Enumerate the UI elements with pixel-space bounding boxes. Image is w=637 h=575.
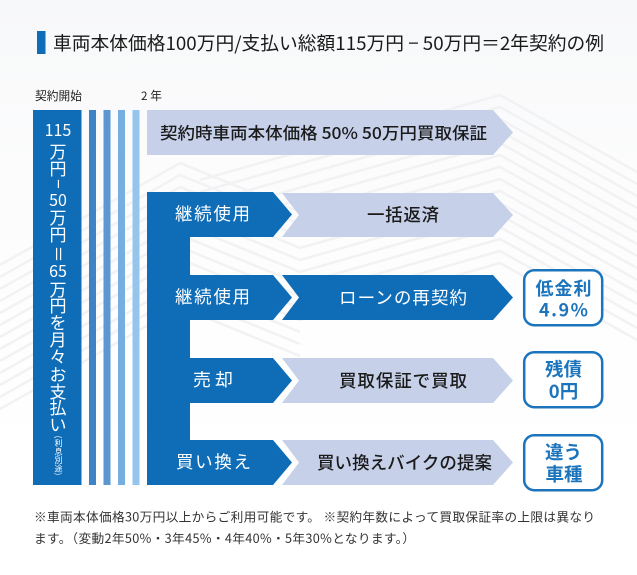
- panel: monthly payment column: 円: [50, 155, 66, 180]
- arrow: loan re-contract: [282, 275, 513, 320]
- panel: monthly payment column: 万: [50, 276, 66, 301]
- panel: monthly payment column: を: [50, 309, 66, 334]
- arrow: guaranteed buyback: 契約時車両本体価格 50% 50万円買取保証: [160, 120, 487, 144]
- arrow: sale: [147, 358, 292, 403]
- callout: zero residual: 0円: [549, 378, 578, 404]
- footnote: ※車両本体価格30万円以上からご利用可能です。 ※契約年数によって買取保証率の上限は異なり: [34, 506, 595, 526]
- arrow: replacement: [147, 440, 292, 485]
- footnote: [34, 506, 595, 547]
- arrow: continue use 2: [147, 275, 292, 320]
- arrow: continue use 1: [147, 192, 292, 237]
- arrow: buyback: 買取保証で買取: [339, 368, 468, 393]
- arrow: continue use 1: 継続使用: [175, 201, 250, 226]
- arrow: replacement bike proposal: [282, 440, 513, 485]
- note: interest separate: 利: [54, 438, 62, 449]
- panel: monthly payment column: 115: [45, 117, 71, 141]
- panel: monthly payment column: 円: [50, 221, 66, 246]
- panel: monthly payment column: お: [50, 361, 66, 386]
- panel: monthly payment column: ＝: [47, 246, 72, 262]
- callout: different model: [524, 435, 602, 490]
- arrow: replacement: 買い換え: [176, 449, 251, 474]
- timeline stripes: [89, 110, 140, 485]
- arrow: guaranteed buyback: [147, 110, 513, 155]
- panel: monthly payment column: [33, 110, 82, 485]
- panel: options spine with arrows: [147, 192, 292, 485]
- label: contract start: 契約開始: [35, 87, 82, 104]
- note: interest separate: 途: [54, 464, 62, 474]
- callout: low interest: 低金利: [536, 275, 592, 301]
- arrow: buyback: [282, 358, 513, 403]
- panel: monthly payment column: 支: [50, 378, 66, 403]
- panel: monthly payment column: 々: [50, 343, 66, 368]
- panel: monthly payment column: 65: [49, 258, 67, 282]
- panel: monthly payment column: 50: [49, 187, 67, 211]
- footnote: ます。（変動2年50%・3年45%・4年40%・5年30%となります。）: [34, 528, 415, 547]
- note: interest separate: (: [52, 436, 64, 439]
- callout: zero residual: [524, 352, 602, 407]
- panel: monthly payment column: 月: [50, 326, 66, 351]
- arrow: continue use 2: 継続使用: [175, 284, 250, 309]
- note: interest separate: 息: [54, 446, 62, 458]
- arrow: sale: 売 却: [193, 367, 233, 392]
- label: 2 years: 2 年: [141, 87, 162, 104]
- panel: monthly payment column: 払: [50, 394, 66, 419]
- callout: different model: 違う: [545, 439, 582, 465]
- panel: monthly payment column: −: [47, 179, 72, 189]
- note: interest separate: [52, 436, 64, 475]
- note: interest separate: ): [52, 473, 64, 475]
- panel: monthly payment column: 円: [50, 292, 66, 317]
- title: 車両本体価格100万円/支払い総額115万円 − 50万円＝2年契約の例: [53, 30, 604, 56]
- callout: different model: 車種: [545, 461, 583, 487]
- arrow: lump-sum repayment: [282, 193, 513, 237]
- note: interest separate: 別: [54, 455, 62, 466]
- panel: monthly payment column: い: [50, 411, 66, 436]
- panel: monthly payment column: 万: [50, 138, 66, 163]
- callout: low interest: 4.9%: [539, 296, 588, 322]
- callout: zero residual: 残債: [545, 356, 582, 382]
- arrow: lump-sum repayment: 一括返済: [367, 202, 440, 227]
- arrow: loan re-contract: ローンの再契約: [339, 285, 467, 310]
- callout: low interest: [524, 270, 602, 325]
- arrow: replacement bike proposal: 買い換えバイクの提案: [317, 450, 492, 475]
- panel: monthly payment column: 万: [50, 204, 66, 229]
